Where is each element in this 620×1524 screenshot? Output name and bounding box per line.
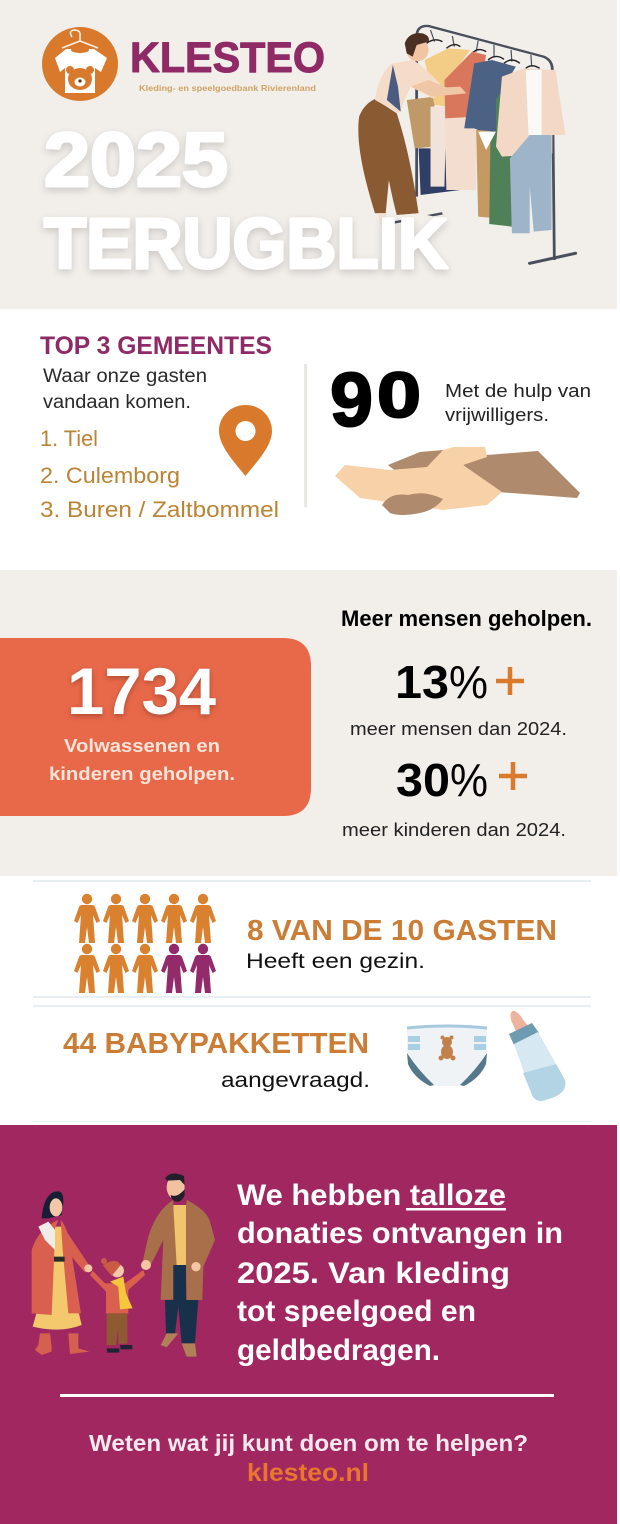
stat: 13 percent more people xyxy=(350,656,567,739)
link: klesteo.nl: klesteo.nl xyxy=(247,1459,369,1487)
icon: handshake xyxy=(335,447,580,515)
icon: ten people, eight orange two purple xyxy=(74,894,216,993)
list: municipalities: 3. Buren / Zaltbommel xyxy=(40,497,279,522)
text: requested: aangevraagd. xyxy=(221,1069,370,1092)
card: 1734 helped xyxy=(0,638,311,816)
logo wordmark: KLESTEO xyxy=(130,34,325,82)
text: donations message: donaties ontvangen in xyxy=(237,1217,563,1250)
illustration: family holding hands xyxy=(32,1173,215,1357)
text: has a family: Heeft een gezin. xyxy=(246,950,425,973)
heading: top 3 gemeentes: TOP 3 GEMEENTES xyxy=(40,332,272,360)
text: donations message: 2025. Van kleding xyxy=(237,1257,510,1290)
text: with help of volunteers: vrijwilligers. xyxy=(445,404,549,425)
stat: 13 percent more people: meer mensen dan 2024. xyxy=(350,719,567,739)
text: adults and children helped: Volwassenen en xyxy=(64,736,220,756)
icon: orange round badge with shirt and bear xyxy=(42,27,118,101)
panel: header xyxy=(0,0,617,309)
title: 2025 xyxy=(44,118,228,203)
title: TERUGBLIK xyxy=(44,205,448,284)
stat: 13 percent more people: 13 xyxy=(395,656,449,708)
stat: 90 volunteers: 0 xyxy=(377,359,421,431)
title xyxy=(44,118,448,284)
icon: location pin xyxy=(219,405,272,476)
list: municipalities: 2. Culemborg xyxy=(40,463,180,488)
text: donations message: tot speelgoed en xyxy=(237,1295,476,1328)
stat: 90 volunteers xyxy=(330,358,421,443)
text: adults and children helped xyxy=(49,736,235,784)
stat: 90 volunteers: 9 xyxy=(330,358,373,443)
icon: baby bottle xyxy=(509,1011,565,1101)
text: with help of volunteers xyxy=(445,380,591,425)
text: donations message xyxy=(237,1179,563,1367)
text: donations message: We hebben talloze xyxy=(237,1179,506,1212)
logo: Klesteo xyxy=(42,27,325,101)
text: where guests come from: Waar onze gasten xyxy=(43,366,207,387)
icon: diaper xyxy=(407,1026,487,1086)
list: municipalities xyxy=(40,426,279,522)
woman xyxy=(32,1191,92,1355)
stat: 30 percent more children: % xyxy=(450,754,488,806)
stat: 13 percent more people: % xyxy=(449,656,488,708)
stat: 30 percent more children: 30 xyxy=(396,754,450,806)
panel: donations xyxy=(0,1125,617,1524)
logo tagline: Kleding- en speelgoedbank Rivierenland xyxy=(139,83,316,93)
text: where guests come from: vandaan komen. xyxy=(43,392,191,413)
child xyxy=(90,1258,145,1353)
stat: 44 baby packages: 44 BABYPAKKETTEN xyxy=(63,1028,369,1060)
stat: 8 of 10 guests: 8 VAN DE 10 GASTEN xyxy=(247,915,557,947)
heading: more people helped: Meer mensen geholpen. xyxy=(341,606,592,631)
panel: more people helped xyxy=(0,570,617,876)
text: donations message: geldbedragen. xyxy=(237,1334,440,1367)
illustration: woman browsing clothes rack xyxy=(358,26,575,263)
call to action: Weten wat jij kunt doen om te helpen? xyxy=(89,1430,528,1456)
text: adults and children helped: kinderen geholpen. xyxy=(49,764,235,784)
panel: top 3 gemeentes and volunteers xyxy=(40,332,591,522)
list: municipalities: 1. Tiel xyxy=(40,426,98,451)
text: where guests come from xyxy=(43,366,207,413)
number: 1734: 1734 xyxy=(67,654,216,728)
stat: 30 percent more children xyxy=(342,754,566,840)
text: with help of volunteers: Met de hulp van xyxy=(445,380,591,401)
stat: 30 percent more children: meer kinderen dan 2024. xyxy=(342,820,566,840)
panel: family and baby stats xyxy=(33,880,591,1122)
man xyxy=(141,1173,215,1357)
